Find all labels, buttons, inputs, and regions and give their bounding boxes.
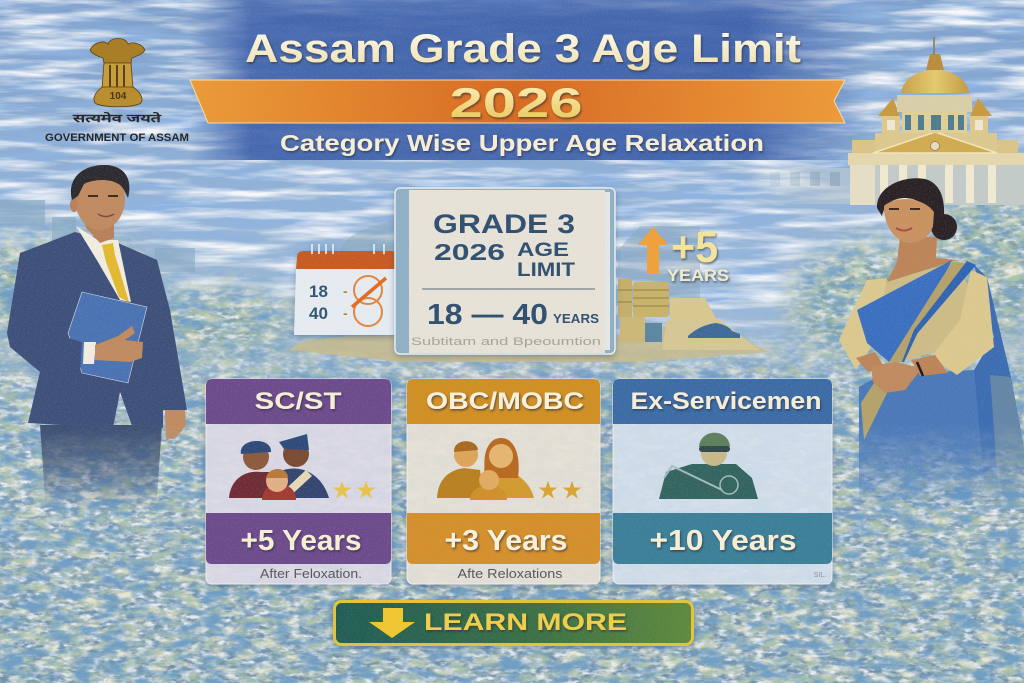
footnote: SIL.	[814, 572, 826, 579]
hair bun	[931, 214, 957, 240]
up arrow with plus five years	[638, 223, 729, 285]
gold pleat band	[861, 383, 887, 440]
gold saree band	[889, 262, 967, 362]
hills and buildings behind central card	[290, 220, 770, 362]
hair	[71, 165, 129, 200]
neck	[85, 224, 114, 243]
base	[94, 87, 142, 107]
distant city skyline left	[0, 200, 195, 272]
coin stacks and car	[618, 279, 760, 350]
right forearm	[911, 355, 948, 376]
category card: OBC/MOBC: +3 Years	[444, 525, 568, 557]
category card: Ex-Servicemen	[613, 379, 832, 584]
hand on folder	[95, 326, 143, 362]
sleeve	[70, 338, 82, 370]
card limit: LIMIT	[517, 259, 575, 281]
value band	[206, 513, 391, 564]
category card: SC/ST	[206, 379, 391, 584]
car	[688, 323, 740, 338]
clasped hands	[871, 362, 922, 393]
left forearm	[856, 352, 885, 372]
category card: OBC/MOBC	[407, 379, 600, 584]
lion capital	[90, 38, 145, 63]
card heading: GRADE 3	[433, 209, 575, 239]
skirt	[859, 370, 987, 512]
footnote: Afte Reloxations	[458, 566, 563, 581]
government emblem: 104	[110, 91, 127, 102]
jacket	[7, 232, 187, 428]
icon: down arrow	[369, 608, 415, 638]
calendar numbers: 40	[309, 304, 328, 323]
right drape	[974, 265, 1024, 512]
emblem motto: सत्यमेव जयते	[71, 111, 162, 125]
blouse left arm	[839, 278, 887, 370]
crossed-out circles	[352, 276, 386, 326]
value band	[613, 513, 832, 564]
category card: Ex-Servicemen: +10 Years	[650, 525, 796, 557]
heading: Ex-Servicemen	[630, 388, 822, 415]
calendar icon	[294, 244, 397, 335]
button label: LEARN MORE	[424, 609, 627, 636]
heading: SC/ST	[254, 388, 342, 415]
government of assam label: GOVERNMENT OF ASSAM	[45, 132, 189, 144]
icon: soldier	[659, 433, 812, 499]
footnote: After Feloxation.	[260, 566, 362, 581]
heading: OBC/MOBC	[426, 388, 584, 415]
title background band	[190, 0, 870, 160]
subtitle: Category Wise Upper Age Relaxation	[280, 130, 764, 156]
calendar numbers: -	[343, 305, 348, 321]
orange arrow	[638, 227, 668, 274]
icon: family in traditional dress	[229, 434, 376, 502]
title: Assam Grade 3 Age Limit	[245, 27, 801, 71]
cuff	[83, 342, 96, 364]
government emblem	[90, 38, 145, 107]
card years: YEARS	[553, 312, 599, 326]
blue saree front	[857, 260, 952, 362]
learn more button	[334, 602, 692, 644]
stars: ★★	[538, 480, 582, 502]
ribbon with year	[190, 79, 845, 126]
bracelet	[917, 362, 923, 376]
neck and chest	[887, 237, 957, 282]
capitol building	[745, 37, 1024, 205]
head	[884, 199, 934, 243]
hair	[877, 178, 944, 222]
face	[88, 195, 118, 197]
trousers	[40, 425, 162, 512]
icon: family	[437, 438, 582, 502]
woman in blue saree	[839, 178, 1024, 512]
other hand	[165, 410, 186, 440]
columns	[102, 63, 133, 88]
card age range: 18 — 40	[427, 299, 548, 331]
value band	[407, 513, 600, 564]
card age: AGE	[517, 239, 569, 261]
stars: ★★	[332, 480, 376, 502]
years: YEARS	[667, 266, 729, 285]
calendar numbers: 18	[309, 282, 328, 301]
faint footnote: Subtitam and Bpeoumtion	[411, 336, 601, 348]
calendar numbers	[309, 282, 348, 323]
head	[75, 180, 125, 230]
blouse right arm	[931, 270, 994, 375]
ears	[70, 198, 78, 212]
central age limit card	[395, 188, 615, 354]
shirt	[76, 226, 131, 302]
card year: 2026	[434, 239, 505, 265]
plus five: +5	[671, 223, 718, 272]
calendar numbers: -	[343, 283, 348, 299]
blouse body	[884, 262, 968, 361]
pwd label: -PwD-	[771, 481, 812, 493]
man in suit	[7, 165, 187, 512]
blue folder	[68, 292, 147, 383]
face	[889, 208, 920, 210]
year 2026: 2026	[450, 79, 582, 126]
category card: SC/ST: +5 Years	[240, 525, 362, 557]
tie	[102, 243, 129, 302]
